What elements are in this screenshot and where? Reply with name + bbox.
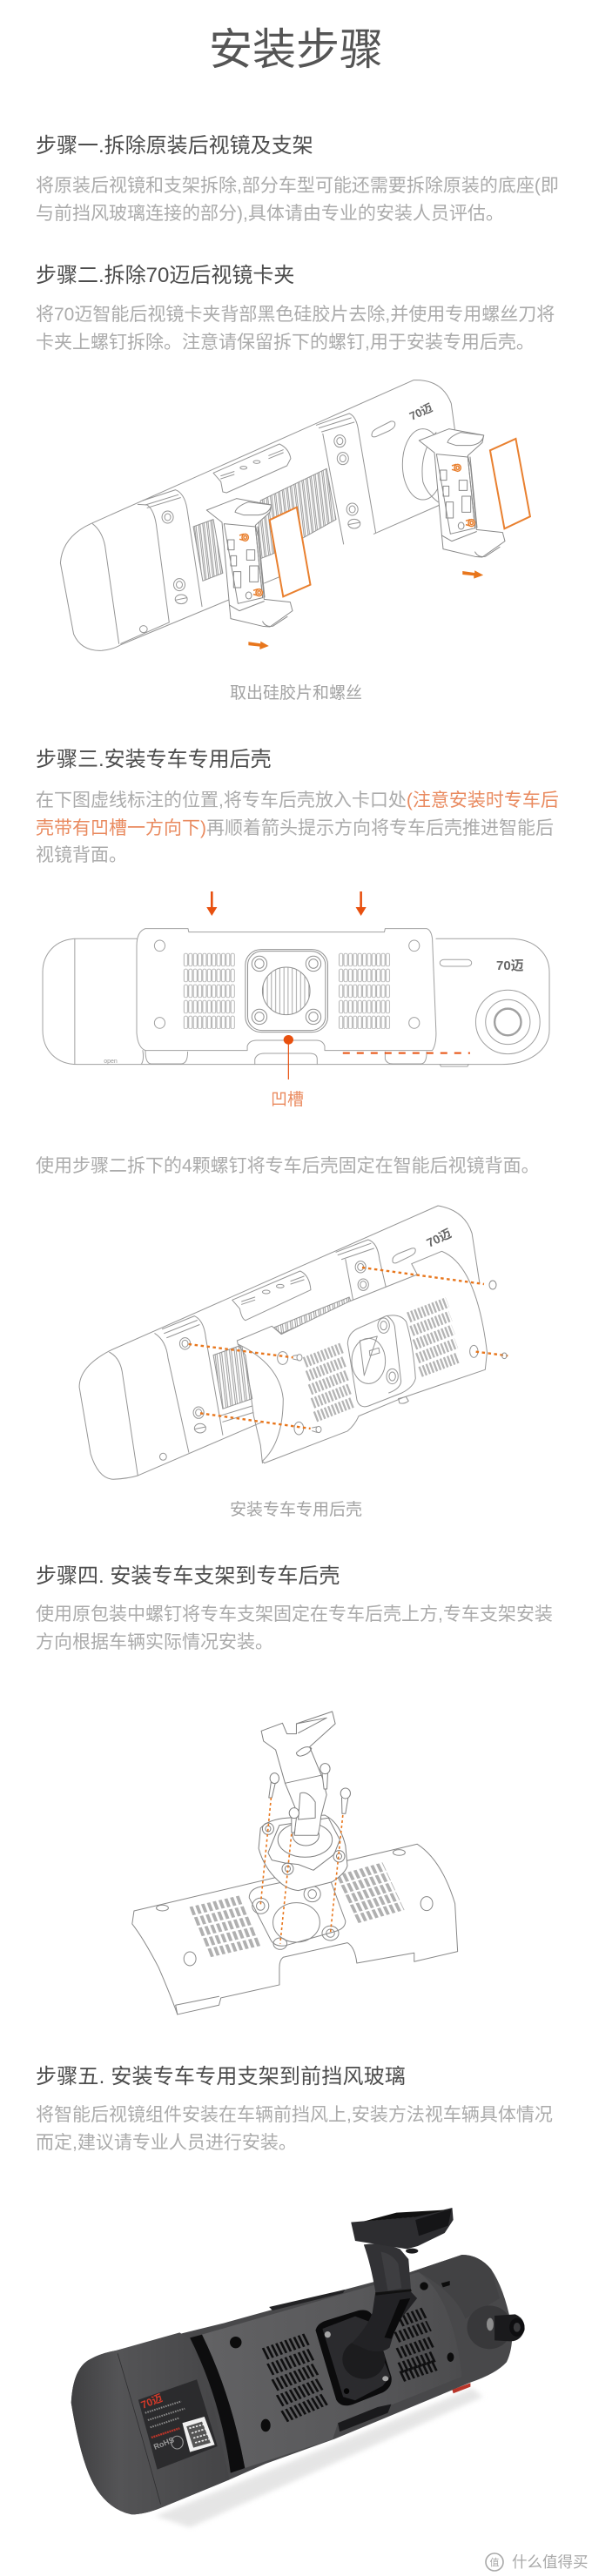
text: step 3 body: 壳带有凹槽一方向下)再顺着箭头提示方向将专车后壳推进智能后: [36, 818, 554, 837]
clip: right: [419, 429, 505, 557]
ground shadow: [156, 2388, 482, 2527]
text: step 3 screws: 使用步骤二拆下的4颗螺钉将专车后壳固定在智能后视镜背面。: [36, 1156, 540, 1176]
text: step 5 body: [36, 2105, 553, 2153]
text: step 2 body: 将70迈智能后视镜卡夹背部黑色硅胶片去除,并使用专用螺丝刀将: [36, 305, 555, 325]
sticker: [138, 2379, 218, 2470]
grille right: [396, 2312, 436, 2377]
upper dotted guide and screw: [362, 1268, 496, 1289]
heading: step 4: 步骤四. 安装专车支架到专车后壳: [36, 1564, 340, 1588]
heading: step 1: 步骤一.拆除原装后视镜及支架: [36, 134, 313, 158]
notch marker and dashed guide: [284, 1035, 470, 1079]
text: step 1 body: 与前挡风玻璃连接的部分),具体请由专业的安装人员评估。: [36, 204, 504, 223]
holes: [230, 2281, 454, 2431]
rear shell: [237, 1251, 487, 1463]
top bracket: [351, 2208, 454, 2249]
text: step 1 body: [36, 176, 559, 223]
photo: assembled mirror with bracket: RoHS: [152, 2435, 175, 2452]
text: step 3 body: [36, 790, 559, 865]
heading: step 2: 步骤二.拆除70迈后视镜卡夹: [36, 264, 294, 287]
push arrows: [206, 891, 367, 916]
arm: [352, 2291, 417, 2351]
dotted guides: [260, 1798, 343, 1944]
red tab: [452, 2383, 470, 2393]
mount plate: [246, 950, 327, 1032]
mirror body: [79, 1206, 480, 1479]
shell details: [189, 1302, 508, 1435]
text: step 2 body: 卡夹上螺钉拆除。注意请保留拆下的螺钉,用于安装专用后壳。: [36, 333, 535, 352]
caption: figure 1: 取出硅胶片和螺丝: [230, 684, 362, 703]
bracket arm: [261, 1712, 335, 1835]
left cap: [71, 2332, 230, 2514]
diagram: rear shell front view: [42, 891, 550, 1079]
open mark: open: [104, 1059, 118, 1065]
text: step 4 body: [36, 1604, 553, 1652]
bottom notch: [338, 2404, 391, 2431]
mirror body: [71, 2255, 512, 2514]
text: step 2 body: [36, 305, 555, 352]
diagram: remove silicone pads and screws: [59, 380, 531, 651]
dotted screw guides: [189, 1344, 508, 1429]
text: step 3 body: 在下图虚线标注的位置,将专车后壳放入卡口处(注意安装时专车后: [36, 790, 559, 810]
rear shell: [137, 929, 436, 1065]
label: notch: 凹槽: [271, 1091, 304, 1109]
photo: assembled mirror with bracket: [71, 2208, 589, 2572]
shell mount: [278, 1315, 478, 1435]
text: step 5 body: 而定,建议请专业人员进行安装。: [36, 2133, 297, 2153]
rear camera: [467, 2305, 512, 2349]
clip: left: [206, 499, 293, 627]
arrows: [248, 570, 483, 649]
mount plate: [315, 2310, 392, 2405]
watermark: 值: [489, 2557, 500, 2568]
sticker text: 70迈: [139, 2391, 165, 2411]
mirror body: [43, 938, 549, 1066]
text: step 1 body: 将原装后视镜和支架拆除,部分车型可能还需要拆除原装的底座(即: [36, 176, 559, 196]
text: step 3 body: 视镜背面。: [36, 845, 127, 865]
shell grilles: [191, 1866, 402, 1953]
bracket base: [259, 1815, 347, 1891]
silicone pads: [248, 439, 530, 649]
shell grilles: [305, 1302, 459, 1417]
diagram: fasten rear shell: [78, 1205, 508, 1480]
heading: step 5: 步骤五. 安装专车专用支架到前挡风玻璃: [36, 2065, 406, 2088]
rear shell: [202, 2272, 462, 2468]
text: step 5 body: 将智能后视镜组件安装在车辆前挡风上,安装方法视车辆具体情况: [36, 2105, 553, 2125]
screws: [293, 1353, 507, 1433]
text: step 4 body: 方向根据车辆实际情况安装。: [36, 1631, 273, 1652]
logo: 70迈: [496, 958, 524, 973]
text: step 4 body: 使用原包装中螺钉将专车支架固定在专车后壳上方,专车支架安装: [36, 1604, 553, 1624]
watermark: 什么值得买: [512, 2553, 589, 2571]
title: 安装步骤: [209, 25, 383, 74]
caption: figure 3: 安装专车专用后壳: [230, 1501, 362, 1519]
grilles: [184, 953, 390, 1029]
shell: [132, 1844, 458, 2014]
mirror body outline: [60, 380, 455, 650]
diagram: mount bracket on shell: [131, 1712, 458, 2014]
logo: 70迈: [407, 401, 434, 423]
logo: 70迈: [424, 1226, 454, 1250]
bolts: [269, 1764, 350, 1833]
black crescent: [190, 2335, 245, 2473]
heading: step 3: 步骤三.安装专车专用后壳: [36, 748, 272, 771]
qr code: [182, 2417, 215, 2452]
grille left: [265, 2339, 327, 2417]
